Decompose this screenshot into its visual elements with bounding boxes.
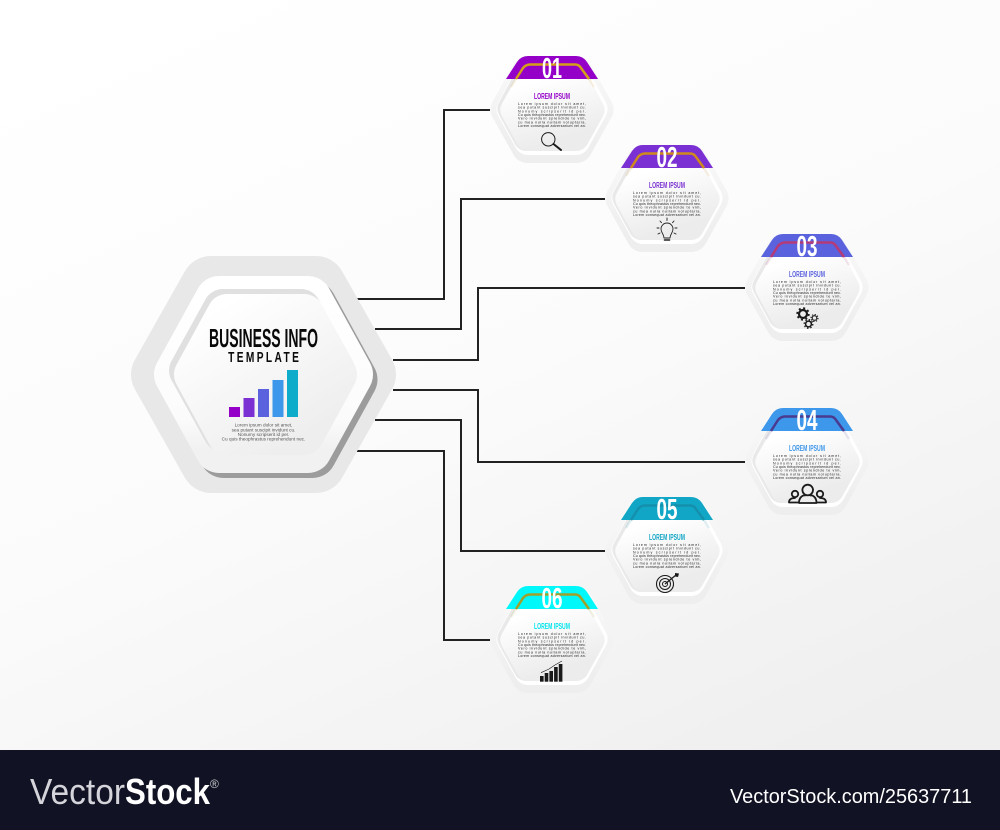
logo: ®: [210, 777, 219, 791]
number: 03: [796, 231, 818, 263]
body text: Nonumy scripserit id per.: [518, 639, 586, 643]
panel: card 05: [621, 494, 713, 592]
heading: BUSINESS INFO: [209, 323, 318, 353]
panel: central hexagon: [161, 286, 366, 463]
body text: sea putant suscipit invidunt cu.: [773, 458, 841, 462]
icon: light bulb: [657, 218, 677, 240]
number: 02: [656, 142, 678, 174]
card title: LOREM IPSUM: [649, 180, 685, 190]
logo: Stock: [125, 771, 211, 812]
body text: Lorem consequat adversarium vel an.: [633, 213, 701, 217]
body text: Vero invidunt splendide te vim,: [518, 647, 586, 651]
body text: Lorem consequat adversarium vel an.: [518, 124, 586, 128]
bar chart: [229, 370, 298, 417]
body text: Cu quis theophrastus reprehendunt nec.: [773, 465, 841, 469]
panel: card 02: [621, 142, 713, 240]
body text: Cu quis theophrastus reprehendunt nec.: [518, 643, 586, 647]
description text: Lorem ipsum dolor sit amet,: [235, 423, 292, 428]
body text: cu mea nulla nullam voluptaria.: [633, 561, 701, 565]
number: 01: [542, 53, 562, 85]
body text: sea putant suscipit invidunt cu.: [773, 284, 841, 288]
body text: sea putant suscipit invidunt cu.: [633, 547, 701, 551]
logo: [30, 771, 219, 812]
connector lines: [357, 110, 745, 640]
footer bar: [0, 750, 1000, 830]
tab line: [516, 594, 589, 609]
panel: card 03: [761, 231, 853, 328]
icon: gears: [797, 308, 818, 328]
body text: Cu quis theophrastus reprehendunt nec.: [633, 202, 701, 206]
body text: Nonumy scripserit id per.: [633, 550, 701, 554]
logo: Vector: [30, 771, 125, 812]
body text: Nonumy scripserit id per.: [773, 461, 841, 465]
body text: Lorem ipsum dolor sit amet,: [518, 102, 586, 106]
icon: growth chart: [540, 661, 562, 682]
body text: Lorem ipsum dolor sit amet,: [518, 632, 586, 636]
body text: [518, 632, 586, 658]
body text: cu mea nulla nullam voluptaria.: [633, 209, 701, 213]
number: 06: [542, 583, 562, 615]
body text: Lorem consequat adversarium vel an.: [518, 654, 586, 658]
body text: Nonumy scripserit id per.: [773, 287, 841, 291]
body text: cu mea nulla nullam voluptaria.: [773, 298, 841, 302]
body text: Lorem ipsum dolor sit amet,: [773, 280, 841, 284]
body text: Lorem ipsum dolor sit amet,: [633, 543, 701, 547]
card title: LOREM IPSUM: [789, 443, 825, 453]
description text: [222, 423, 305, 442]
card title: LOREM IPSUM: [534, 91, 570, 101]
body text: cu mea nulla nullam voluptaria.: [518, 120, 586, 124]
body text: Cu quis theophrastus reprehendunt nec.: [633, 554, 701, 558]
body text: Lorem consequat adversarium vel an.: [633, 565, 701, 569]
body text: Vero invidunt splendide te vim,: [773, 295, 841, 299]
header tab: [506, 586, 598, 609]
panel: card 01: [506, 53, 598, 150]
body text: Lorem consequat adversarium vel an.: [773, 476, 841, 480]
body text: [518, 102, 586, 128]
panel: card 04: [761, 405, 853, 503]
body text: [773, 280, 841, 306]
body text: Cu quis theophrastus reprehendunt nec.: [773, 291, 841, 295]
description text: sea putant suscipit invidunt cu.: [232, 427, 295, 432]
header tab: [621, 497, 713, 520]
body text: Lorem ipsum dolor sit amet,: [773, 454, 841, 458]
tab line: [631, 154, 704, 168]
card title: LOREM IPSUM: [534, 621, 570, 631]
subheading: TEMPLATE: [228, 349, 299, 365]
number: 05: [656, 494, 678, 526]
body text: Nonumy scripserit id per.: [518, 109, 586, 113]
body text: cu mea nulla nullam voluptaria.: [773, 472, 841, 476]
body text: Vero invidunt splendide te vim,: [633, 206, 701, 210]
body text: cu mea nulla nullam voluptaria.: [518, 650, 586, 654]
header tab: [761, 234, 853, 257]
description text: Nonumy scripserit id per.: [238, 432, 289, 437]
description text: Cu quis theophrastus reprehendunt nec.: [222, 437, 305, 442]
body text: [633, 543, 701, 569]
tab line: [516, 64, 589, 79]
body text: Lorem ipsum dolor sit amet,: [633, 191, 701, 195]
card title: LOREM IPSUM: [649, 532, 685, 542]
body text: sea putant suscipit invidunt cu.: [518, 106, 586, 110]
image id: VectorStock.com/25637711: [730, 786, 972, 808]
card title: LOREM IPSUM: [789, 269, 825, 279]
body text: [773, 454, 841, 480]
body text: sea putant suscipit invidunt cu.: [633, 195, 701, 199]
header tab: [621, 145, 713, 168]
body text: [633, 191, 701, 217]
body text: sea putant suscipit invidunt cu.: [518, 636, 586, 640]
tab line: [771, 242, 844, 257]
icon: people: [789, 485, 826, 503]
body text: Nonumy scripserit id per.: [633, 198, 701, 202]
icon: magnifier: [542, 133, 561, 150]
body text: Vero invidunt splendide te vim,: [773, 469, 841, 473]
body text: Cu quis theophrastus reprehendunt nec.: [518, 113, 586, 117]
number: 04: [796, 405, 818, 437]
tab line: [771, 416, 844, 431]
panel: card 06: [506, 583, 598, 682]
icon: target: [656, 573, 679, 592]
body text: Vero invidunt splendide te vim,: [518, 117, 586, 121]
header tab: [761, 408, 853, 431]
body text: Vero invidunt splendide te vim,: [633, 558, 701, 562]
tab line: [631, 506, 704, 520]
header tab: [506, 56, 598, 79]
body text: Lorem consequat adversarium vel an.: [773, 302, 841, 306]
